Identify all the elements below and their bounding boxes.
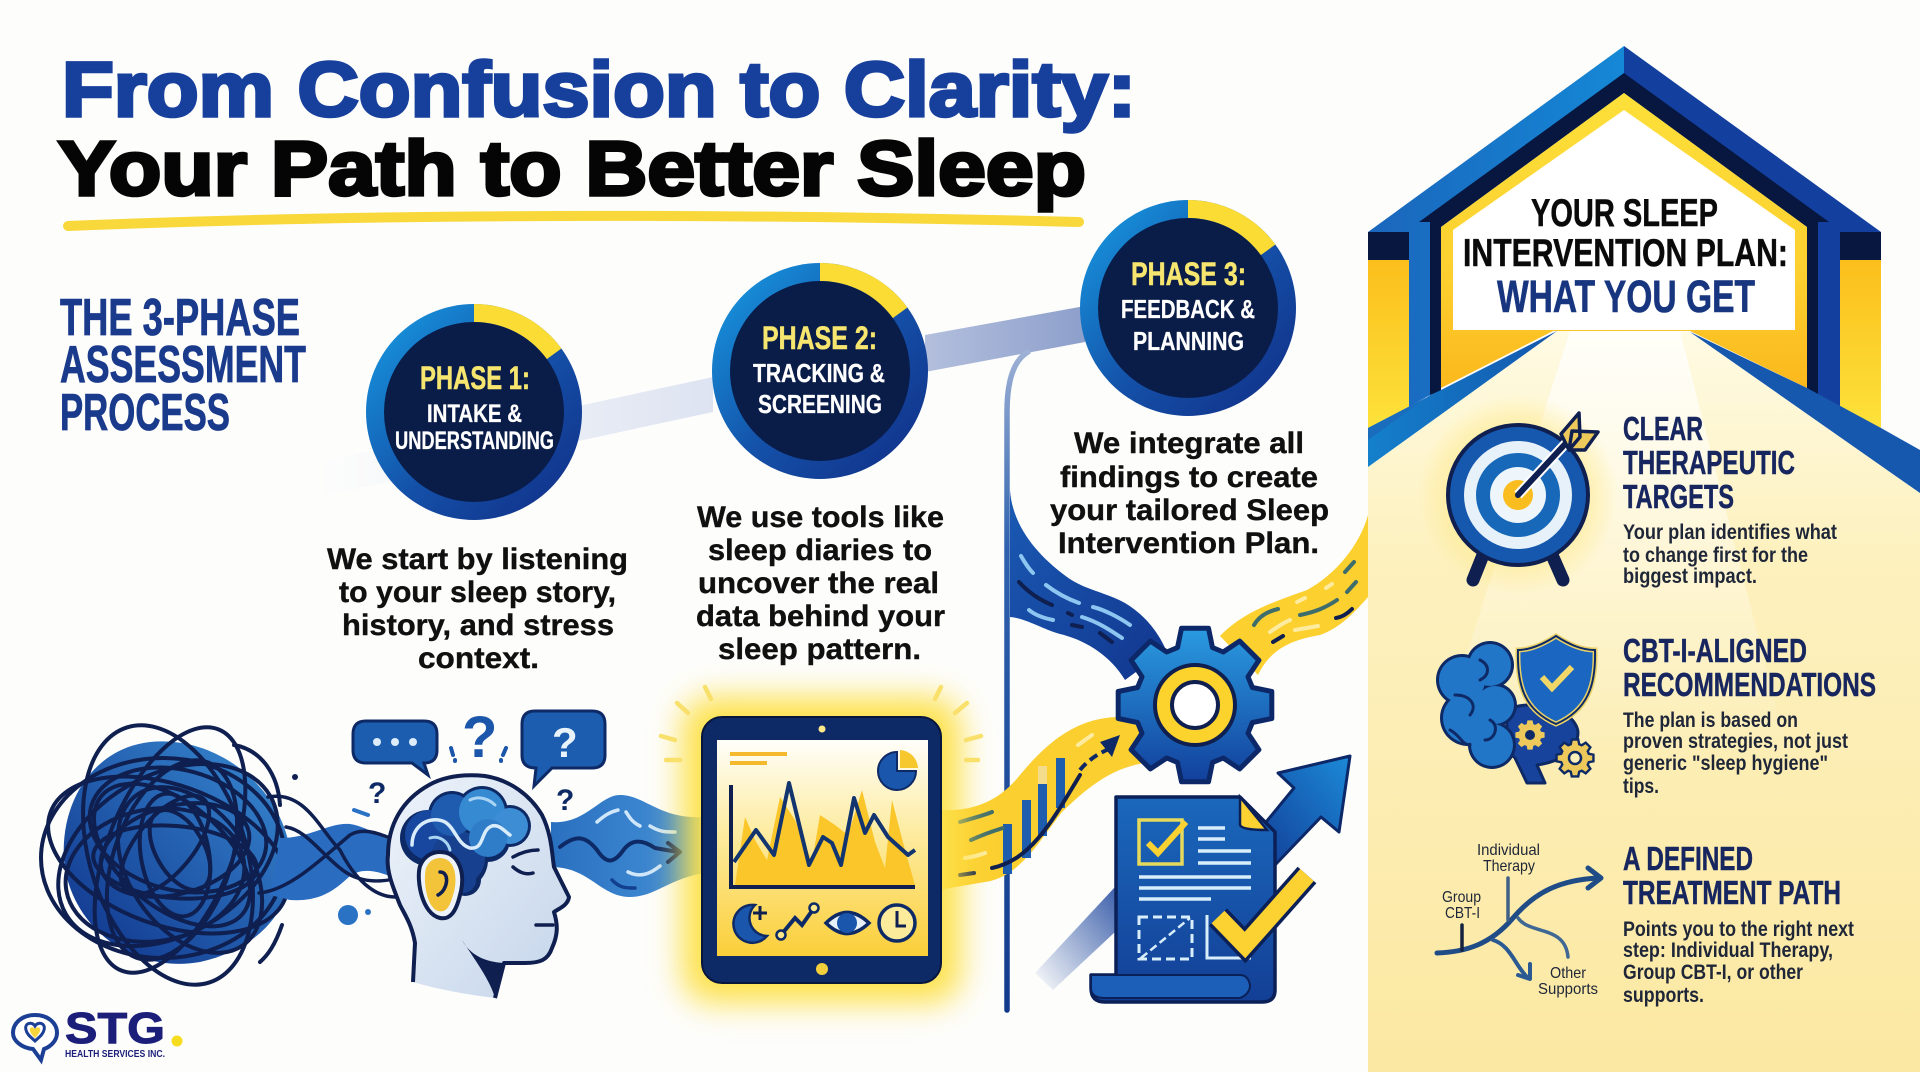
section heading: 3-phase process: THE 3-PHASE: [60, 289, 300, 347]
illustration: tangled scribble: [26, 703, 310, 1007]
phase 1 description: context.: [418, 642, 539, 675]
connector band between phases: [318, 306, 1085, 497]
item 1 text: TARGETS: [1623, 478, 1734, 515]
item 2 text: tips.: [1623, 774, 1659, 798]
icon: treatment path diagram: Group: [1442, 889, 1481, 906]
item 2 text: [1623, 632, 1876, 798]
title line 2: Your Path to Better Sleep: [58, 126, 1086, 212]
question marks: ?: [462, 705, 497, 770]
phase 1 badge: [366, 304, 582, 520]
phase 2 badge: PHASE 2:: [762, 320, 877, 356]
logo: STG Health Services: [13, 1004, 182, 1060]
phase 3 description: We integrate all: [1074, 427, 1304, 460]
icon: speech bubble with question mark: [522, 711, 605, 786]
logo: STG Health Services: STG: [65, 1004, 165, 1053]
question marks: ?: [368, 777, 386, 810]
icon: brain with shield and gears: [1436, 636, 1595, 783]
roof dark band: [1419, 73, 1829, 395]
section heading: 3-phase process: ASSESSMENT: [60, 336, 306, 394]
phase 3 badge: FEEDBACK &: [1121, 294, 1255, 324]
item 1 text: Your plan identifies what: [1623, 520, 1837, 544]
icon: treatment path diagram: CBT-I: [1445, 905, 1480, 922]
brain lower lobe: [1507, 705, 1578, 783]
item 1 text: THERAPEUTIC: [1623, 444, 1795, 481]
item 3 text: [1623, 840, 1854, 1007]
brain: [400, 786, 531, 896]
question marks: [368, 705, 574, 817]
phase 1 description: We start by listening: [327, 543, 628, 576]
moon icon: [733, 905, 767, 943]
icon: treatment path diagram: Other: [1550, 965, 1587, 982]
item 1 text: to change first for the: [1623, 543, 1808, 567]
phase 1 badge: UNDERSTANDING: [395, 427, 554, 455]
panel heading: WHAT YOU GET: [1497, 271, 1755, 322]
illustration: flow from head to tablet: [551, 795, 705, 897]
phase 2 description: sleep diaries to: [708, 534, 932, 567]
phase 2 description: [696, 501, 945, 666]
item 3 text: A DEFINED: [1623, 840, 1753, 877]
icon: target with arrow: [1418, 395, 1618, 595]
illustration: yellow flow to gear: [938, 717, 1145, 890]
item 2 text: The plan is based on: [1623, 708, 1798, 732]
ear: [419, 852, 462, 918]
illustration: flow into head: [259, 796, 410, 925]
item 3 text: Points you to the right next: [1623, 917, 1854, 941]
icon: speech bubble with dots: [353, 721, 437, 775]
icon: treatment path diagram: Supports: [1538, 981, 1598, 998]
brain left lobes: [1436, 641, 1517, 769]
item 2 text: proven strategies, not just: [1623, 729, 1848, 753]
phase 3 badge: PLANNING: [1133, 326, 1244, 356]
phase 1 description: history, and stress: [342, 609, 614, 642]
icon: treatment path diagram: [1437, 842, 1601, 998]
phase 3 badge: [1080, 200, 1296, 416]
item 1 text: CLEAR: [1623, 410, 1703, 447]
phase 2 badge: SCREENING: [758, 389, 882, 419]
panel heading: YOUR SLEEP: [1531, 192, 1718, 235]
icon: treatment path diagram: Individual: [1477, 842, 1540, 859]
white title plate: [1453, 110, 1795, 330]
clock icon: [879, 905, 915, 941]
phase 1 description: [327, 543, 628, 675]
icon: gear: [1118, 628, 1272, 782]
panel: house roof header: [1368, 46, 1920, 493]
item 3 text: supports.: [1623, 983, 1704, 1007]
item 3 text: TREATMENT PATH: [1623, 874, 1841, 911]
phase 1 badge: PHASE 1:: [420, 360, 530, 396]
icon: plan document: [1091, 797, 1307, 1002]
title line 1: From Confusion to Clarity:: [62, 47, 1136, 133]
phase 1 description: to your sleep story,: [339, 576, 616, 609]
roof right: [1624, 46, 1881, 407]
illustration: blue flow into gear: [1010, 490, 1166, 680]
eave blocks: [1368, 232, 1409, 260]
phase 2 description: sleep pattern.: [718, 633, 921, 666]
icon: growth arrow: [1035, 756, 1350, 990]
yellow gable: [1441, 93, 1807, 388]
panel heading: [1463, 192, 1788, 322]
illustration: head with brain: [388, 775, 569, 998]
logo: STG Health Services: HEALTH SERVICES INC.: [65, 1048, 165, 1060]
icon: tablet with sleep chart: [682, 697, 961, 1003]
phase 2 description: uncover the real: [698, 567, 939, 600]
roof left: [1368, 46, 1624, 407]
phase 3 description: your tailored Sleep: [1050, 494, 1329, 527]
section heading: 3-phase process: [60, 289, 306, 442]
phase 3 badge: PHASE 3:: [1131, 256, 1246, 292]
phase 2 badge: [712, 263, 928, 479]
question marks: ?: [556, 784, 574, 817]
chart area: [735, 790, 915, 885]
blue roof rays: [1368, 331, 1557, 467]
phase 2 description: We use tools like: [697, 501, 944, 534]
vertical timeline line: [1007, 352, 1028, 1010]
phase 2 badge: TRACKING &: [753, 358, 885, 388]
section heading: 3-phase process: PROCESS: [60, 384, 230, 442]
icon: speech bubble with question mark: ?: [552, 719, 578, 766]
phase 3 description: Intervention Plan.: [1058, 527, 1319, 560]
illustration: yellow flow from right: [1220, 515, 1368, 675]
panel: what you get background: [1368, 331, 1920, 1072]
tablet glow rays: [661, 687, 981, 760]
chart line: [734, 783, 915, 865]
item 3 text: Group CBT-I, or other: [1623, 960, 1804, 984]
phase 1 badge: INTAKE &: [427, 400, 522, 428]
phase 3 description: [1050, 427, 1329, 560]
item 3 text: step: Individual Therapy,: [1623, 938, 1833, 962]
phase 3 description: findings to create: [1060, 461, 1318, 494]
item 1 text: [1623, 410, 1837, 588]
title: [58, 47, 1136, 226]
item 2 text: generic "sleep hygiene": [1623, 751, 1828, 775]
trend icon: [781, 908, 814, 935]
item 2 text: CBT-I-ALIGNED: [1623, 632, 1807, 669]
phase 2 description: data behind your: [696, 600, 945, 633]
icon: treatment path diagram: Therapy: [1483, 858, 1535, 875]
title underline: [68, 216, 1079, 226]
eye icon: [826, 912, 869, 934]
item 1 text: biggest impact.: [1623, 564, 1757, 588]
panel heading: INTERVENTION PLAN:: [1463, 232, 1788, 275]
